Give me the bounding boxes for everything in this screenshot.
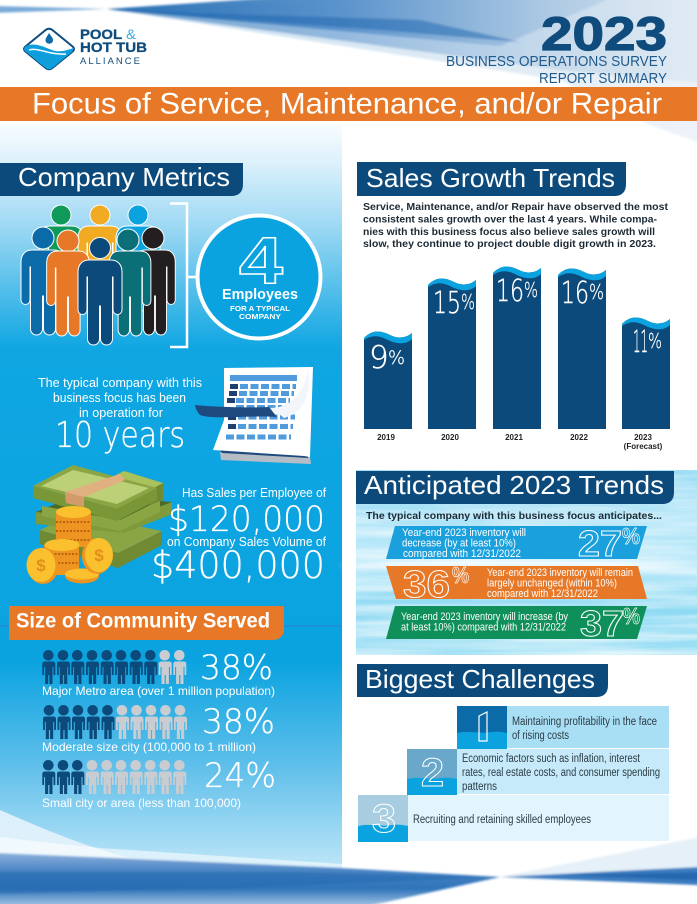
- trend: inventory increase 37%: at least 10%) compared with 12/31/2022: [401, 622, 566, 634]
- footer swoosh: [0, 810, 697, 904]
- heading: biggest challenges: Biggest Challenges: [365, 664, 595, 694]
- sales growth paragraph: [363, 201, 668, 250]
- bar: 2023 forecast: 2023: [634, 433, 652, 442]
- report title: REPORT SUMMARY: [539, 70, 667, 87]
- report title: [446, 7, 667, 87]
- employees circle callout: 4: [239, 223, 283, 297]
- challenge 1: of rising costs: [512, 730, 569, 742]
- coin stacks: $: [36, 556, 46, 575]
- trend: inventory decrease 27%: decrease (by at least 10%): [402, 538, 516, 550]
- trend: inventory decrease 27%: Year-end 2023 inventory will: [402, 527, 526, 539]
- years in operation text: business focus has been: [53, 391, 186, 405]
- bar: 2023 forecast: %: [648, 329, 662, 353]
- bracket: [170, 204, 198, 347]
- bar: 2019: 9: [369, 340, 389, 376]
- trends intro text: The typical company with this business focus anticipates...: [366, 510, 662, 522]
- sales figures: [151, 485, 326, 587]
- years in operation text: in operation for: [79, 406, 163, 420]
- heading: size of community served: Size of Community Served: [16, 610, 270, 632]
- bar chart: sales growth: [364, 267, 670, 451]
- challenge 3: 3: [372, 797, 396, 841]
- pictogram: small city: 24%: [204, 756, 276, 796]
- header swoosh streaks: [0, 0, 697, 150]
- years in operation text: 10 years: [55, 415, 185, 456]
- bar: 2021: 16: [496, 274, 524, 309]
- report title: 2023: [541, 7, 667, 60]
- logo wordmark: ALLIANCE: [80, 56, 140, 67]
- sales figures: $120,000: [168, 500, 325, 540]
- trend: inventory decrease 27%: compared with 12/31/2022: [403, 548, 521, 560]
- cash stacks: [33, 465, 172, 568]
- bar: 2023 forecast: [622, 318, 670, 451]
- heading: sales growth trends: Sales Growth Trends: [366, 163, 615, 193]
- trend: inventory increase 37%: Year-end 2023 inventory will increase (by: [401, 611, 568, 623]
- bar: 2019: [364, 332, 412, 442]
- bar: 2022: [558, 269, 606, 442]
- trend: inventory unchanged 36%: [386, 562, 647, 606]
- trend: inventory increase 37%: [386, 603, 647, 644]
- sales figures: Has Sales per Employee of: [182, 485, 326, 500]
- challenge 3: Recruiting and retaining skilled employees: [413, 814, 591, 826]
- sales growth paragraph: nies with this business focus also believe sales growth will: [363, 226, 655, 238]
- sales growth paragraph: consistent sales growth over the last 4 years. While compa-: [363, 214, 657, 226]
- bar: 2022: 16: [561, 276, 589, 311]
- icon: diamond with water: [24, 29, 74, 69]
- trend: inventory decrease 27%: [386, 523, 647, 564]
- heading: anticipated 2023 trends: Anticipated 2023 Trends: [364, 470, 664, 500]
- challenge 3: [358, 795, 669, 842]
- logo wordmark: HOT TUB: [80, 39, 147, 55]
- pictogram: moderate city: 38%: [202, 702, 275, 742]
- challenge 2: 2: [421, 751, 444, 795]
- report title: BUSINESS OPERATIONS SURVEY: [446, 53, 667, 70]
- trend: inventory decrease 27%: 27: [578, 523, 622, 564]
- bar: 2022: %: [589, 280, 604, 304]
- trend: inventory decrease 27%: %: [622, 523, 640, 549]
- employees circle callout: [198, 216, 320, 338]
- bar: 2020: 15: [433, 286, 461, 321]
- bar: 2019: 2019: [377, 433, 395, 442]
- pictogram: moderate city: Moderate size city (100,000 to 1 million): [42, 740, 256, 754]
- bar: 2020: 2020: [441, 433, 459, 442]
- challenge 1: Maintaining profitability in the face: [512, 716, 657, 728]
- pictogram: major metro: 38%: [200, 648, 273, 688]
- sales figures: on Company Sales Volume of: [167, 534, 326, 549]
- challenge 2: Economic factors such as inflation, interest: [462, 753, 641, 765]
- years in operation text: [38, 376, 202, 456]
- coin stacks: $: [94, 546, 104, 565]
- panel: anticipated trends water background: [340, 470, 697, 655]
- logo wordmark: &: [126, 26, 137, 42]
- trend: inventory increase 37%: 37: [580, 603, 624, 644]
- heading: company metrics: Company Metrics: [18, 162, 230, 192]
- logo wordmark: POOL: [80, 26, 122, 42]
- heading: size of community served: [9, 606, 284, 640]
- bar: 2021: [493, 267, 541, 442]
- bar: 2021: 2021: [505, 433, 523, 442]
- years in operation text: The typical company with this: [38, 376, 202, 390]
- bar: 2021: %: [524, 278, 538, 302]
- bar: 2020: [428, 279, 476, 442]
- pictogram: small city: Small city or area (less than 100,000): [42, 796, 241, 810]
- logo wordmark: [80, 26, 147, 67]
- trend: inventory unchanged 36%: %: [452, 562, 469, 588]
- trend: inventory unchanged 36%: Year-end 2023 inventory will remain: [487, 567, 633, 579]
- challenge 1: [457, 706, 669, 749]
- logo: [24, 26, 147, 69]
- pictogram: small city: [42, 756, 276, 810]
- trend: inventory unchanged 36%: compared with 12/31/2022: [487, 588, 598, 600]
- sales growth paragraph: slow, they continue to project double digit growth in 2023.: [363, 238, 656, 250]
- bar: 2020: %: [461, 290, 475, 314]
- employees circle callout: FOR A TYPICAL: [230, 306, 291, 313]
- pictogram: major metro: Major Metro area (over 1 million population): [42, 684, 275, 698]
- trend: inventory increase 37%: %: [623, 603, 640, 629]
- challenge 2: [407, 749, 669, 795]
- icon: group of employees: [21, 205, 175, 345]
- icon: money and coins: [26, 465, 172, 584]
- trend: inventory unchanged 36%: largely unchanged (within 10%): [487, 578, 617, 590]
- challenge 2: patterns: [462, 781, 497, 793]
- trend: inventory unchanged 36%: 36: [403, 564, 450, 606]
- left column gradient panel: [0, 125, 342, 870]
- sales growth paragraph: Service, Maintenance, and/or Repair have observed the most: [363, 201, 668, 213]
- employees circle callout: Employees: [222, 286, 298, 303]
- employees circle callout: COMPANY: [239, 314, 281, 321]
- bar: 2022: 2022: [570, 433, 588, 442]
- coin stacks: [26, 506, 113, 584]
- orange banner: Focus of Service, Maintenance, and/or Repair: [32, 88, 662, 120]
- thin rule behind community heading: [0, 626, 342, 627]
- pictogram: major metro: [42, 648, 275, 698]
- sales figures: $400,000: [151, 544, 325, 587]
- bar: 2023 forecast: (Forecast): [624, 442, 663, 451]
- bar: 2023 forecast: 11: [633, 325, 648, 360]
- bar: 2019: %: [388, 347, 405, 369]
- pictogram: moderate city: [42, 702, 275, 754]
- icon: calendar: [195, 367, 313, 464]
